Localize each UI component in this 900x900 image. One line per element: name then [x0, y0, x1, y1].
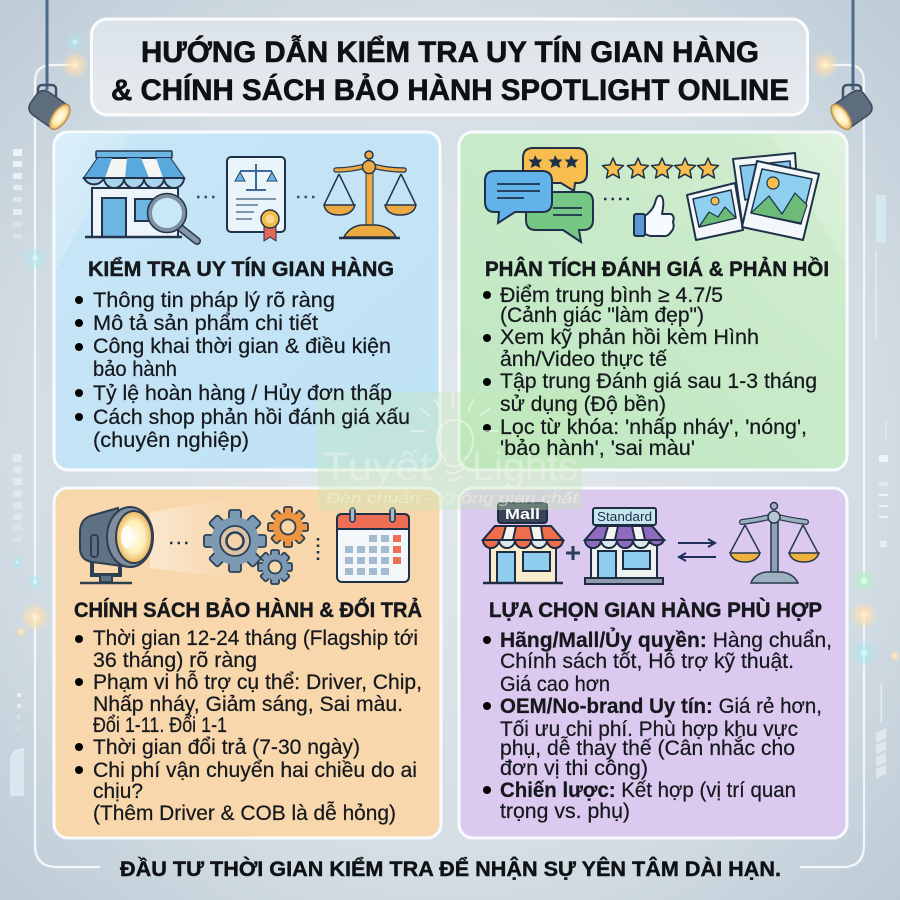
bullet list: shop credibility: (chuyên nghiệp) — [93, 429, 249, 452]
bullet list: đơn vị thi công) — [500, 757, 648, 780]
bullet list: 36 tháng) rõ ràng — [93, 649, 257, 672]
icon: dots — [197, 196, 315, 198]
bullet list: Hãng/Mall/Ủy quyền: Hàng chuẩn, — [500, 628, 832, 652]
panel: choosing a shop — [459, 488, 847, 838]
panel: shop credibility — [54, 132, 440, 470]
bullet list: Chính sách tốt, Hỗ trợ kỹ thuật. — [500, 650, 794, 673]
bullet list: Tối ưu chi phí. Phù hợp khu vực — [500, 718, 798, 741]
bullet list: review analysis: (Cảnh giác "làm đẹp") — [500, 304, 704, 327]
icon: chat bubbles — [485, 148, 593, 242]
bullet list: review analysis: Xem kỹ phản hồi kèm Hình — [500, 326, 759, 349]
bullet list: Nhấp nháy, Giảm sáng, Sai màu. — [93, 693, 403, 716]
icon: grey scales — [730, 502, 819, 583]
bullet list — [483, 628, 832, 823]
bullet list: shop credibility: Công khai thời gian & điều kiện — [93, 335, 391, 358]
icon: mall store — [483, 503, 563, 583]
heading: LỰA CHỌN GIAN HÀNG PHÙ HỢP — [489, 597, 822, 622]
bullet list: (Thêm Driver & COB là dễ hỏng) — [93, 802, 396, 825]
bullet list: review analysis: Tập trung Đánh giá sau 1-3 tháng — [500, 370, 817, 393]
title text: HƯỚNG DẪN KIỂM TRA UY TÍN GIAN HÀNG — [141, 35, 759, 69]
bullet list: shop credibility: Tỷ lệ hoàn hàng / Hủy đơn thấp — [93, 382, 392, 405]
bullet list: Phạm vi hỗ trợ cụ thể: Driver, Chip, — [93, 671, 422, 694]
plus sign — [566, 546, 580, 560]
panel: review analysis — [459, 132, 847, 470]
icon: golden scales — [324, 151, 416, 238]
watermark slogan: Đèn chuẩn - Không gian chất — [326, 490, 579, 507]
bullet list: review analysis: 'bảo hành', 'sai màu' — [500, 437, 695, 460]
icon: five stars — [602, 158, 718, 178]
bullet list: Giá cao hơn — [500, 673, 610, 696]
bullet list: phụ, dễ thay thế (Cân nhắc cho — [500, 737, 795, 760]
bullet list: Thời gian đổi trả (7-30 ngày) — [93, 736, 360, 759]
icon: calendar — [337, 508, 409, 582]
watermark logo and slogan — [322, 393, 579, 507]
bullet list: shop credibility: bảo hành — [93, 358, 177, 381]
icon: mall store: Mall — [505, 506, 540, 523]
bullet list: review analysis: ảnh/Video thực tế — [500, 348, 667, 371]
title box — [92, 19, 808, 115]
icon: standard store: Standard — [597, 510, 652, 524]
title text: & CHÍNH SÁCH BẢO HÀNH SPOTLIGHT ONLINE — [111, 73, 789, 107]
watermark name — [322, 445, 578, 489]
panel: warranty policy — [54, 488, 441, 838]
heading: CHÍNH SÁCH BẢO HÀNH & ĐỔI TRẢ — [74, 597, 422, 622]
icon: dots — [604, 198, 632, 200]
watermark name: Tuyết — [322, 445, 432, 489]
icon: spotlight — [80, 507, 153, 583]
icon: shop with magnifier — [84, 151, 197, 241]
bullet list: Đổi 1-11. Đổi 1-1 — [93, 714, 227, 737]
icon: gears — [204, 507, 308, 584]
bullet list: review analysis: Điểm trung bình ≥ 4.7/5 — [500, 284, 723, 307]
icon: exchange arrows — [678, 539, 716, 561]
title text — [111, 35, 789, 107]
heading: PHÂN TÍCH ĐÁNH GIÁ & PHẢN HỒI — [485, 256, 829, 281]
bullet list — [75, 627, 422, 825]
footer message: ĐẦU TƯ THỜI GIAN KIỂM TRA ĐỂ NHẬN SỰ YÊN TÂM DÀI HẠN. — [120, 856, 781, 881]
bullet list: review analysis: Lọc từ khóa: 'nhấp nháy', 'nóng', — [500, 416, 807, 439]
watermark name: Lights — [472, 445, 578, 489]
bullet list: trọng vs. phụ) — [500, 800, 630, 823]
bullet list: Thời gian 12-24 tháng (Flagship tới — [93, 627, 418, 650]
bullet list: shop credibility: Mô tả sản phẩm chi tiết — [93, 312, 318, 335]
icon: thumbs up — [634, 196, 674, 236]
bullet list: review analysis — [483, 284, 817, 460]
bullet list: shop credibility: Thông tin pháp lý rõ ràng — [93, 289, 335, 312]
watermark bulb icon — [411, 393, 498, 480]
spotlight left — [25, 0, 74, 133]
bullet list: review analysis: sử dụng (Độ bền) — [500, 393, 666, 416]
watermark background — [318, 392, 582, 510]
spotlight right — [827, 0, 876, 133]
bullet list: shop credibility — [75, 289, 410, 452]
bullet list: chịu? — [93, 780, 143, 803]
bullet list: shop credibility: Cách shop phản hồi đánh giá xấu — [93, 406, 410, 429]
icon: standard store — [585, 508, 664, 584]
bullet list: Chiến lược: Kết hợp (vị trí quan — [500, 779, 796, 802]
icon: certificate document — [227, 157, 285, 241]
icon: dots vertical — [317, 538, 319, 564]
bullet list: Chi phí vận chuyển hai chiều do ai — [93, 759, 417, 782]
side decorations — [11, 149, 888, 795]
icon: photos — [687, 153, 819, 240]
bullet list: OEM/No-brand Uy tín: Giá rẻ hơn, — [500, 695, 822, 718]
heading: KIỂM TRA UY TÍN GIAN HÀNG — [88, 256, 394, 281]
icon: dots — [170, 542, 188, 544]
